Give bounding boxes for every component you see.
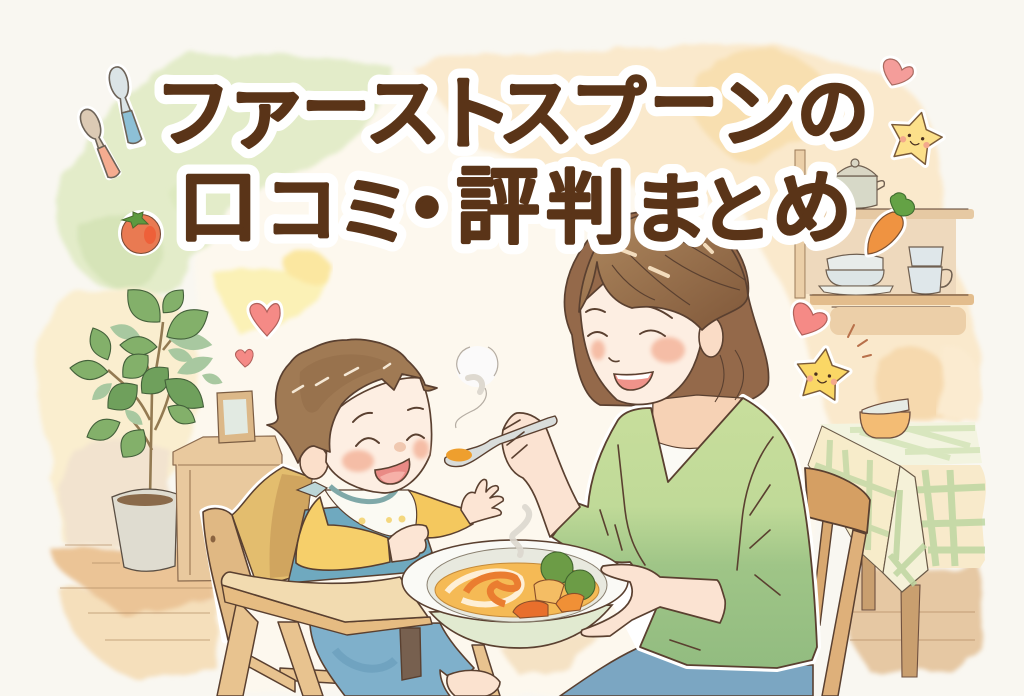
mother white tee xyxy=(652,440,705,482)
title line 1: ー xyxy=(302,71,370,147)
baby nose xyxy=(394,442,406,452)
title line 2: ま xyxy=(632,168,708,253)
plant in pot xyxy=(69,280,224,571)
shelf frame xyxy=(795,150,974,335)
plaid cloth front fold xyxy=(883,466,928,592)
title line 2: 評 xyxy=(456,160,540,254)
mother eyes xyxy=(586,306,672,336)
baby foot xyxy=(447,670,500,696)
title line 1: プ xyxy=(570,72,646,157)
icon: blue spoon xyxy=(106,65,143,147)
soup bowl xyxy=(402,540,725,648)
title line 1: ス xyxy=(498,72,574,157)
sweater fold lines xyxy=(600,437,780,650)
title line 1: ー xyxy=(650,67,718,143)
high chair back xyxy=(203,467,312,640)
icon: tomato xyxy=(118,210,164,256)
title line 1: ス xyxy=(498,72,574,157)
side table xyxy=(173,436,282,581)
baby hand left xyxy=(388,525,428,562)
icon: orange spoon xyxy=(77,106,121,179)
plant pale leaves xyxy=(88,320,224,429)
sparkle marks xyxy=(848,325,871,357)
side table and picture frame xyxy=(173,391,282,581)
table legs xyxy=(862,555,920,677)
title line 1: ァ xyxy=(224,64,308,158)
bowl inside xyxy=(427,548,607,622)
steam above baby xyxy=(456,346,498,428)
title line 2: ・ xyxy=(382,161,472,261)
title line 1: ー xyxy=(650,67,718,143)
title line 1: ト xyxy=(433,70,513,159)
title line 2: 口 xyxy=(178,163,258,252)
baby bib xyxy=(325,490,417,536)
title line 2 xyxy=(178,160,852,261)
pot xyxy=(835,159,884,208)
mother ear xyxy=(699,317,723,357)
title line 2: と xyxy=(700,172,772,252)
picture frame xyxy=(217,391,255,443)
mother face xyxy=(580,250,705,404)
title xyxy=(155,64,869,261)
mother cheeks xyxy=(591,337,685,363)
baby xyxy=(267,339,503,696)
mother xyxy=(502,211,817,696)
title line 2: め xyxy=(772,164,852,253)
stacked cups xyxy=(908,247,952,294)
baby hand right xyxy=(461,479,503,524)
baby yellow body and arm xyxy=(296,497,390,570)
title line 1: の xyxy=(797,73,869,153)
table with plaid cloth xyxy=(808,399,986,677)
high chair tray xyxy=(222,572,432,635)
plant pot xyxy=(112,489,177,571)
wall shelf with dishes xyxy=(795,150,974,335)
icon: star right middle xyxy=(793,345,851,401)
mother neck xyxy=(652,395,742,482)
broccoli xyxy=(541,552,595,600)
title line 1: の xyxy=(797,73,869,153)
title line 2: ミ xyxy=(337,171,411,254)
bowl rim xyxy=(402,540,628,622)
plant stems xyxy=(108,322,175,498)
mother jeans xyxy=(560,647,813,696)
title line 2: 口 xyxy=(178,163,258,252)
spoons icons xyxy=(77,65,143,179)
floor boards xyxy=(60,545,975,640)
title line 1: ン xyxy=(720,72,796,157)
mother back hair xyxy=(565,211,769,408)
title line 2: ・ xyxy=(382,161,472,261)
baby ear xyxy=(300,445,328,479)
carrot pieces xyxy=(513,580,584,618)
baby eyes xyxy=(353,408,424,446)
steam above bowl xyxy=(512,507,529,555)
title line 1: プ xyxy=(570,72,646,157)
spoon in hand xyxy=(445,416,557,467)
title line 2: コ xyxy=(264,168,338,251)
baby hair xyxy=(267,339,437,463)
title line 1: ー xyxy=(302,71,370,147)
title line 2: 判 xyxy=(546,164,626,253)
title line 1: フ xyxy=(155,72,231,157)
icon: carrot xyxy=(868,193,914,254)
plaid cloth right panel xyxy=(900,465,986,568)
hand holding bowl xyxy=(581,564,725,637)
baby legs xyxy=(310,623,474,696)
title line 2: と xyxy=(700,172,772,252)
title line 2: コ xyxy=(264,168,338,251)
title line 1 xyxy=(155,64,869,159)
icon: hearts near plant xyxy=(235,303,280,367)
title line 2: 判 xyxy=(546,164,626,253)
title line 2: ま xyxy=(632,168,708,253)
title line 1: ン xyxy=(720,72,796,157)
bowl body xyxy=(430,605,612,648)
title line 2: め xyxy=(772,164,852,253)
plaid cloth left panel xyxy=(808,426,900,573)
baby mouth xyxy=(375,459,410,484)
title line 1: フ xyxy=(155,72,231,157)
sweater halo xyxy=(552,398,817,668)
plant dark leaves xyxy=(69,280,215,464)
mother front hair xyxy=(579,212,748,330)
title line 1: ト xyxy=(433,70,513,159)
mother's chair xyxy=(805,468,870,696)
small bowl on table xyxy=(860,399,910,438)
icon: heart top right xyxy=(883,59,913,85)
high chair legs xyxy=(217,600,500,696)
bib dots xyxy=(358,516,406,524)
mother forearm and hand xyxy=(502,413,580,537)
icon: heart right middle xyxy=(793,303,827,335)
title line 1: ス xyxy=(365,72,441,157)
baby cheeks xyxy=(342,439,429,472)
soup xyxy=(435,563,599,617)
title line 1: ァ xyxy=(224,64,308,158)
title line 1: ス xyxy=(365,72,441,157)
baby face xyxy=(326,378,432,493)
icon: star top right xyxy=(885,106,947,167)
mother mouth xyxy=(614,372,653,390)
title line 2: ミ xyxy=(337,171,411,254)
baby yellow sleeve right xyxy=(408,490,473,538)
baby apron xyxy=(288,500,432,583)
title line 2: 評 xyxy=(456,160,540,254)
bib ribbon xyxy=(297,482,327,497)
stacked bowls xyxy=(819,254,893,295)
mother hair lines xyxy=(715,350,744,402)
mother nose xyxy=(609,358,619,362)
mother sweater xyxy=(552,398,817,668)
plaid tablecloth top xyxy=(820,422,982,466)
